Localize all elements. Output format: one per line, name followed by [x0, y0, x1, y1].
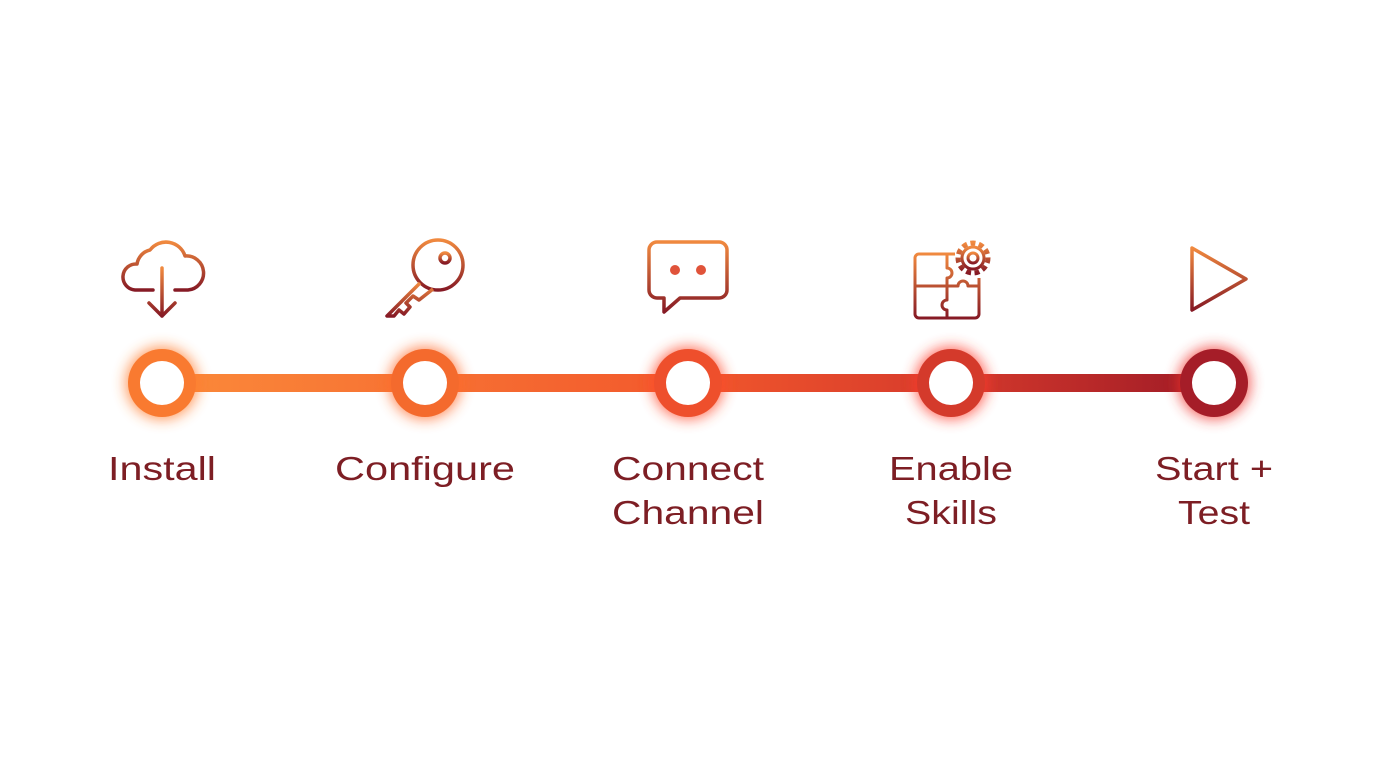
- label: Start + Test: Start +: [1155, 450, 1273, 487]
- label: Start + Test: Test: [1178, 494, 1250, 531]
- icon: cloud download: [123, 242, 204, 316]
- label: Configure: Configure: [335, 450, 515, 487]
- icon: play: [1192, 248, 1246, 310]
- icon: chat bubble: [649, 242, 727, 312]
- node 4: Enable Skills: [915, 347, 987, 419]
- label: Enable Skills: Skills: [905, 494, 997, 531]
- node 3: Connect Channel: [652, 347, 724, 419]
- label: Start + Test: [1155, 450, 1273, 531]
- label: Install: Install: [108, 450, 216, 487]
- label: Enable Skills: [889, 450, 1013, 531]
- label: Connect Channel: Channel: [612, 494, 764, 531]
- node 2: Configure: [389, 347, 461, 419]
- label: Connect Channel: Connect: [612, 450, 764, 487]
- icon: puzzle with gear: [915, 243, 988, 318]
- label: Connect Channel: [612, 450, 764, 531]
- node 1: Install: [126, 347, 198, 419]
- label: Enable Skills: Enable: [889, 450, 1013, 487]
- node 5: Start + Test: [1178, 347, 1250, 419]
- icon: key: [387, 240, 463, 316]
- timeline track: [162, 374, 1214, 392]
